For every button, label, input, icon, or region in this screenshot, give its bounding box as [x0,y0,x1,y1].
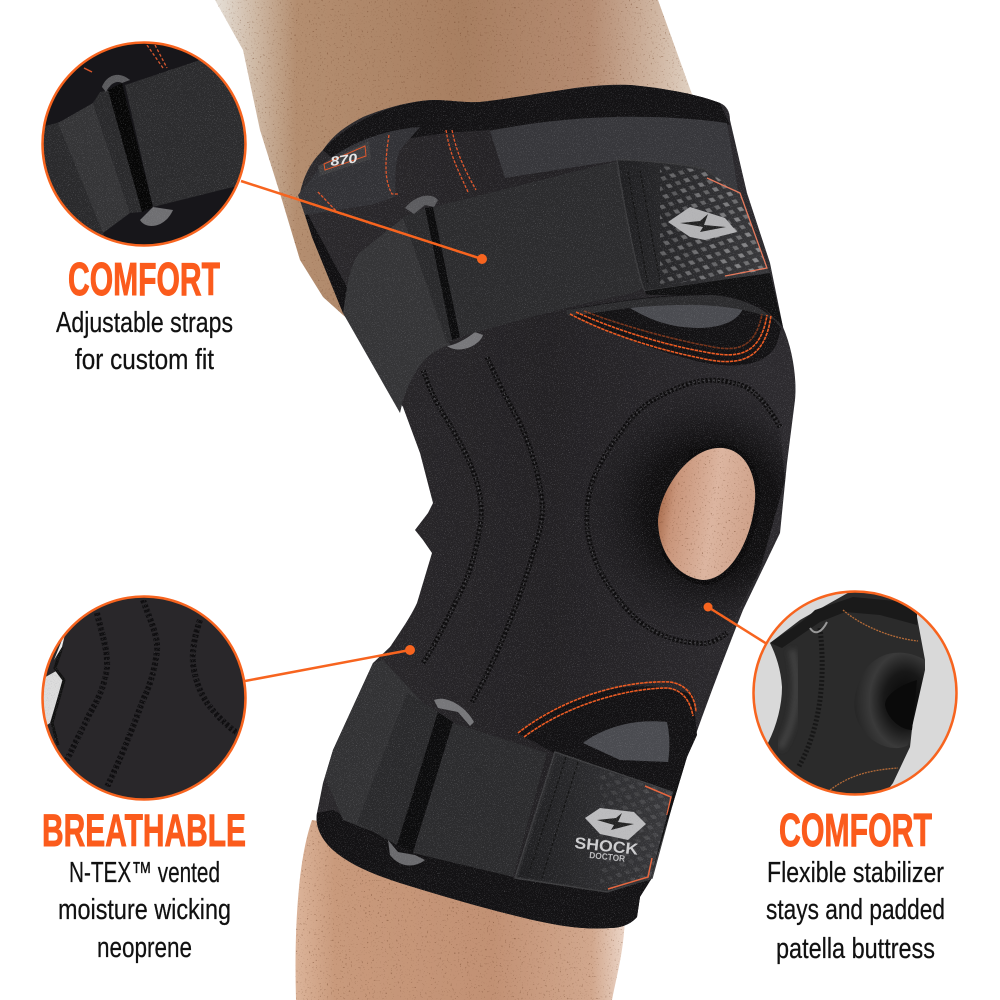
lower strap fold [357,693,438,845]
patella opening shadow [662,444,760,585]
panel: stabilizer detail circle [753,590,957,800]
lower mesh edge [653,757,687,870]
lower d-ring bottom [388,840,425,865]
text: flexible stays: patella buttress [776,933,935,965]
stitch highlights [423,357,780,702]
mesh strap right [645,273,783,327]
text: adjustable straps: for custom fit [75,344,214,376]
leader line: straps [241,181,487,264]
dark side mesh left [300,200,347,313]
lower strap end patch [515,752,680,892]
model badge [318,141,371,176]
lower left strap [325,660,423,837]
patella pad shading [587,380,785,643]
heading: comfort straps: COMFORT [68,253,220,305]
knee brace [298,85,796,929]
patella ring stitching [587,380,780,643]
brace silhouette [300,85,796,929]
model badge: 870 [329,150,359,169]
stay stitching [423,357,780,702]
d-ring upper [405,196,438,214]
upper centre stitching [318,130,476,215]
top rim [323,85,730,165]
text: flexible stays: stays and padded [766,894,945,926]
leg: upper thigh skin [215,0,720,380]
text: adjustable straps: Adjustable straps [56,307,233,339]
left strap fold [403,208,460,343]
upper strap [433,161,643,337]
text: n-tex neoprene: N-TEX™ vented [69,857,220,889]
upper pad mesh [566,295,781,366]
panel: strap detail circle [38,42,250,250]
upper pad gray [630,300,745,328]
panel: neoprene detail circle [40,596,246,800]
upper left gray panel [298,127,420,215]
text: n-tex neoprene [58,857,231,964]
leg: lower shin skin [296,820,625,1000]
text: adjustable straps [56,307,233,376]
shock doctor logo [574,808,646,864]
lower strap [413,723,547,877]
lower orange stitching [518,682,696,737]
patch logo upper [668,207,737,240]
text: flexible stays [766,857,945,965]
patella skin [658,448,755,580]
strap return loop [566,295,783,330]
left strap wrap [343,218,450,413]
lower mesh [517,686,697,793]
leader line: stays [704,602,767,644]
upper pad orange stitching [570,311,771,362]
d-ring lower [447,332,483,350]
leader line: neoprene [245,645,415,681]
bottom rim [317,810,652,929]
lower gray pad [583,721,669,762]
shock doctor logo: SHOCK [574,835,639,859]
shock doctor logo: DOCTOR [589,850,626,864]
upper strap end patch [617,160,770,291]
heading: breathable: BREATHABLE [42,805,246,856]
text: flexible stays: Flexible stabilizer [767,857,944,889]
top gray panel [490,117,738,190]
text: n-tex neoprene: moisture wicking [58,894,231,926]
lower d-ring top [434,699,474,726]
text: n-tex neoprene: neoprene [97,932,192,964]
